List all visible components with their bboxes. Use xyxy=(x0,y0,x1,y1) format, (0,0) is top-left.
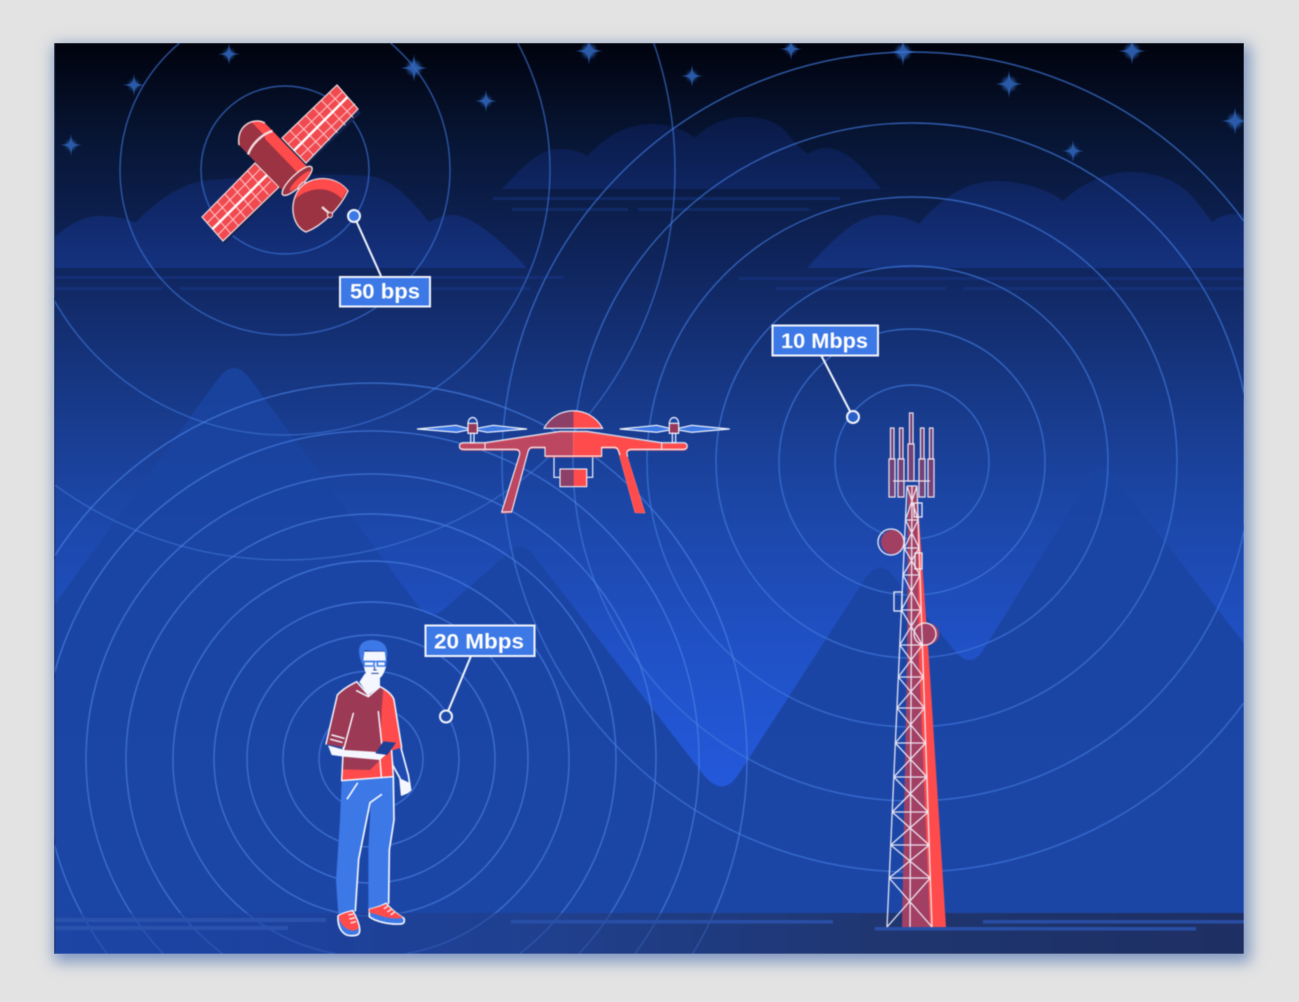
motors xyxy=(468,417,679,443)
solar panel lower xyxy=(202,163,280,244)
signal rings: satellite xyxy=(54,43,676,561)
icon: satellite xyxy=(202,85,361,244)
body outline xyxy=(459,431,687,512)
shirt outline xyxy=(326,682,402,781)
callout: 10 Mbps xyxy=(772,326,878,423)
left shoe xyxy=(338,911,360,936)
tower red dark side xyxy=(902,486,930,927)
body xyxy=(237,119,314,197)
pants xyxy=(336,777,394,915)
callout: 50 bps: 50 bps xyxy=(350,280,420,304)
glasses xyxy=(361,661,387,666)
stars xyxy=(60,37,1249,162)
signal rings: person xyxy=(0,383,747,954)
panel left edge xyxy=(54,43,56,954)
icon: person with phone xyxy=(326,640,411,936)
right arm xyxy=(391,747,411,795)
lattice xyxy=(887,486,932,927)
dome xyxy=(544,411,573,428)
signal rings: tower xyxy=(502,52,1299,872)
dish xyxy=(293,179,348,232)
propellers xyxy=(417,425,729,432)
icon: drone xyxy=(417,411,729,513)
forearm xyxy=(328,745,387,760)
callout: 50 bps xyxy=(340,210,430,306)
neck and face xyxy=(359,673,380,695)
hair xyxy=(359,640,387,665)
mountains xyxy=(54,368,1244,954)
camera xyxy=(560,469,574,487)
ground streaks xyxy=(54,918,1244,930)
body fill xyxy=(459,432,573,513)
dish outlines and equipment boxes xyxy=(878,503,936,645)
tower red bright side xyxy=(917,490,946,927)
right shoe xyxy=(369,903,404,924)
icon: cell tower xyxy=(878,413,946,927)
camera mount xyxy=(554,455,593,477)
shirt bright side xyxy=(343,688,402,781)
phone xyxy=(375,741,396,755)
callout: 10 Mbps: 10 Mbps xyxy=(781,330,868,353)
antennas xyxy=(889,413,934,497)
callout: 20 Mbps: 20 Mbps xyxy=(434,630,524,654)
cloud haze streaks xyxy=(54,197,1244,290)
callout: 20 Mbps xyxy=(426,626,534,722)
ground overlay dimming rings xyxy=(81,912,715,954)
shirt xyxy=(326,682,384,780)
ground xyxy=(454,912,1244,954)
dish fills xyxy=(881,530,905,554)
solar panel upper xyxy=(282,85,361,166)
mouth xyxy=(371,667,379,673)
clouds xyxy=(54,117,1244,268)
